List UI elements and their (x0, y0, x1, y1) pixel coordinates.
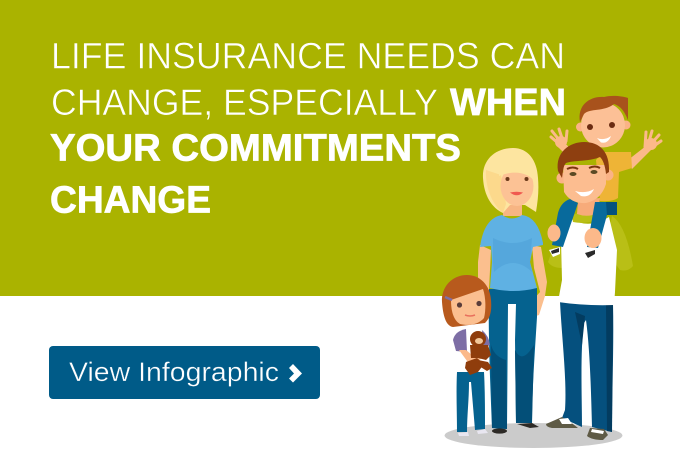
title: CHANGE (50, 180, 211, 222)
hands (548, 224, 560, 242)
figure: daughter with teddy bear (442, 275, 492, 436)
figure: father (546, 142, 633, 440)
title: CHANGE, ESPECIALLY (51, 81, 438, 123)
head (576, 122, 585, 132)
head (556, 172, 568, 184)
boy's legs over father's shoulders (552, 199, 578, 247)
hair (442, 275, 491, 327)
figure: boy on shoulders (upper body) (551, 96, 661, 201)
title: LIFE INSURANCE NEEDS CAN (51, 34, 565, 76)
button: view infographic (49, 346, 320, 399)
hair (483, 148, 538, 213)
teddy bear (465, 331, 492, 375)
panel: green background (0, 0, 680, 296)
icon: chevron (289, 364, 302, 382)
figure: mother (478, 148, 547, 434)
title: YOUR COMMITMENTS (50, 128, 461, 170)
button: view infographic: View Infographic (69, 357, 279, 387)
title: WHEN (450, 82, 566, 124)
ground shadow (444, 423, 622, 448)
illustration: family (442, 96, 661, 448)
shirt (558, 217, 617, 305)
title (50, 34, 566, 222)
